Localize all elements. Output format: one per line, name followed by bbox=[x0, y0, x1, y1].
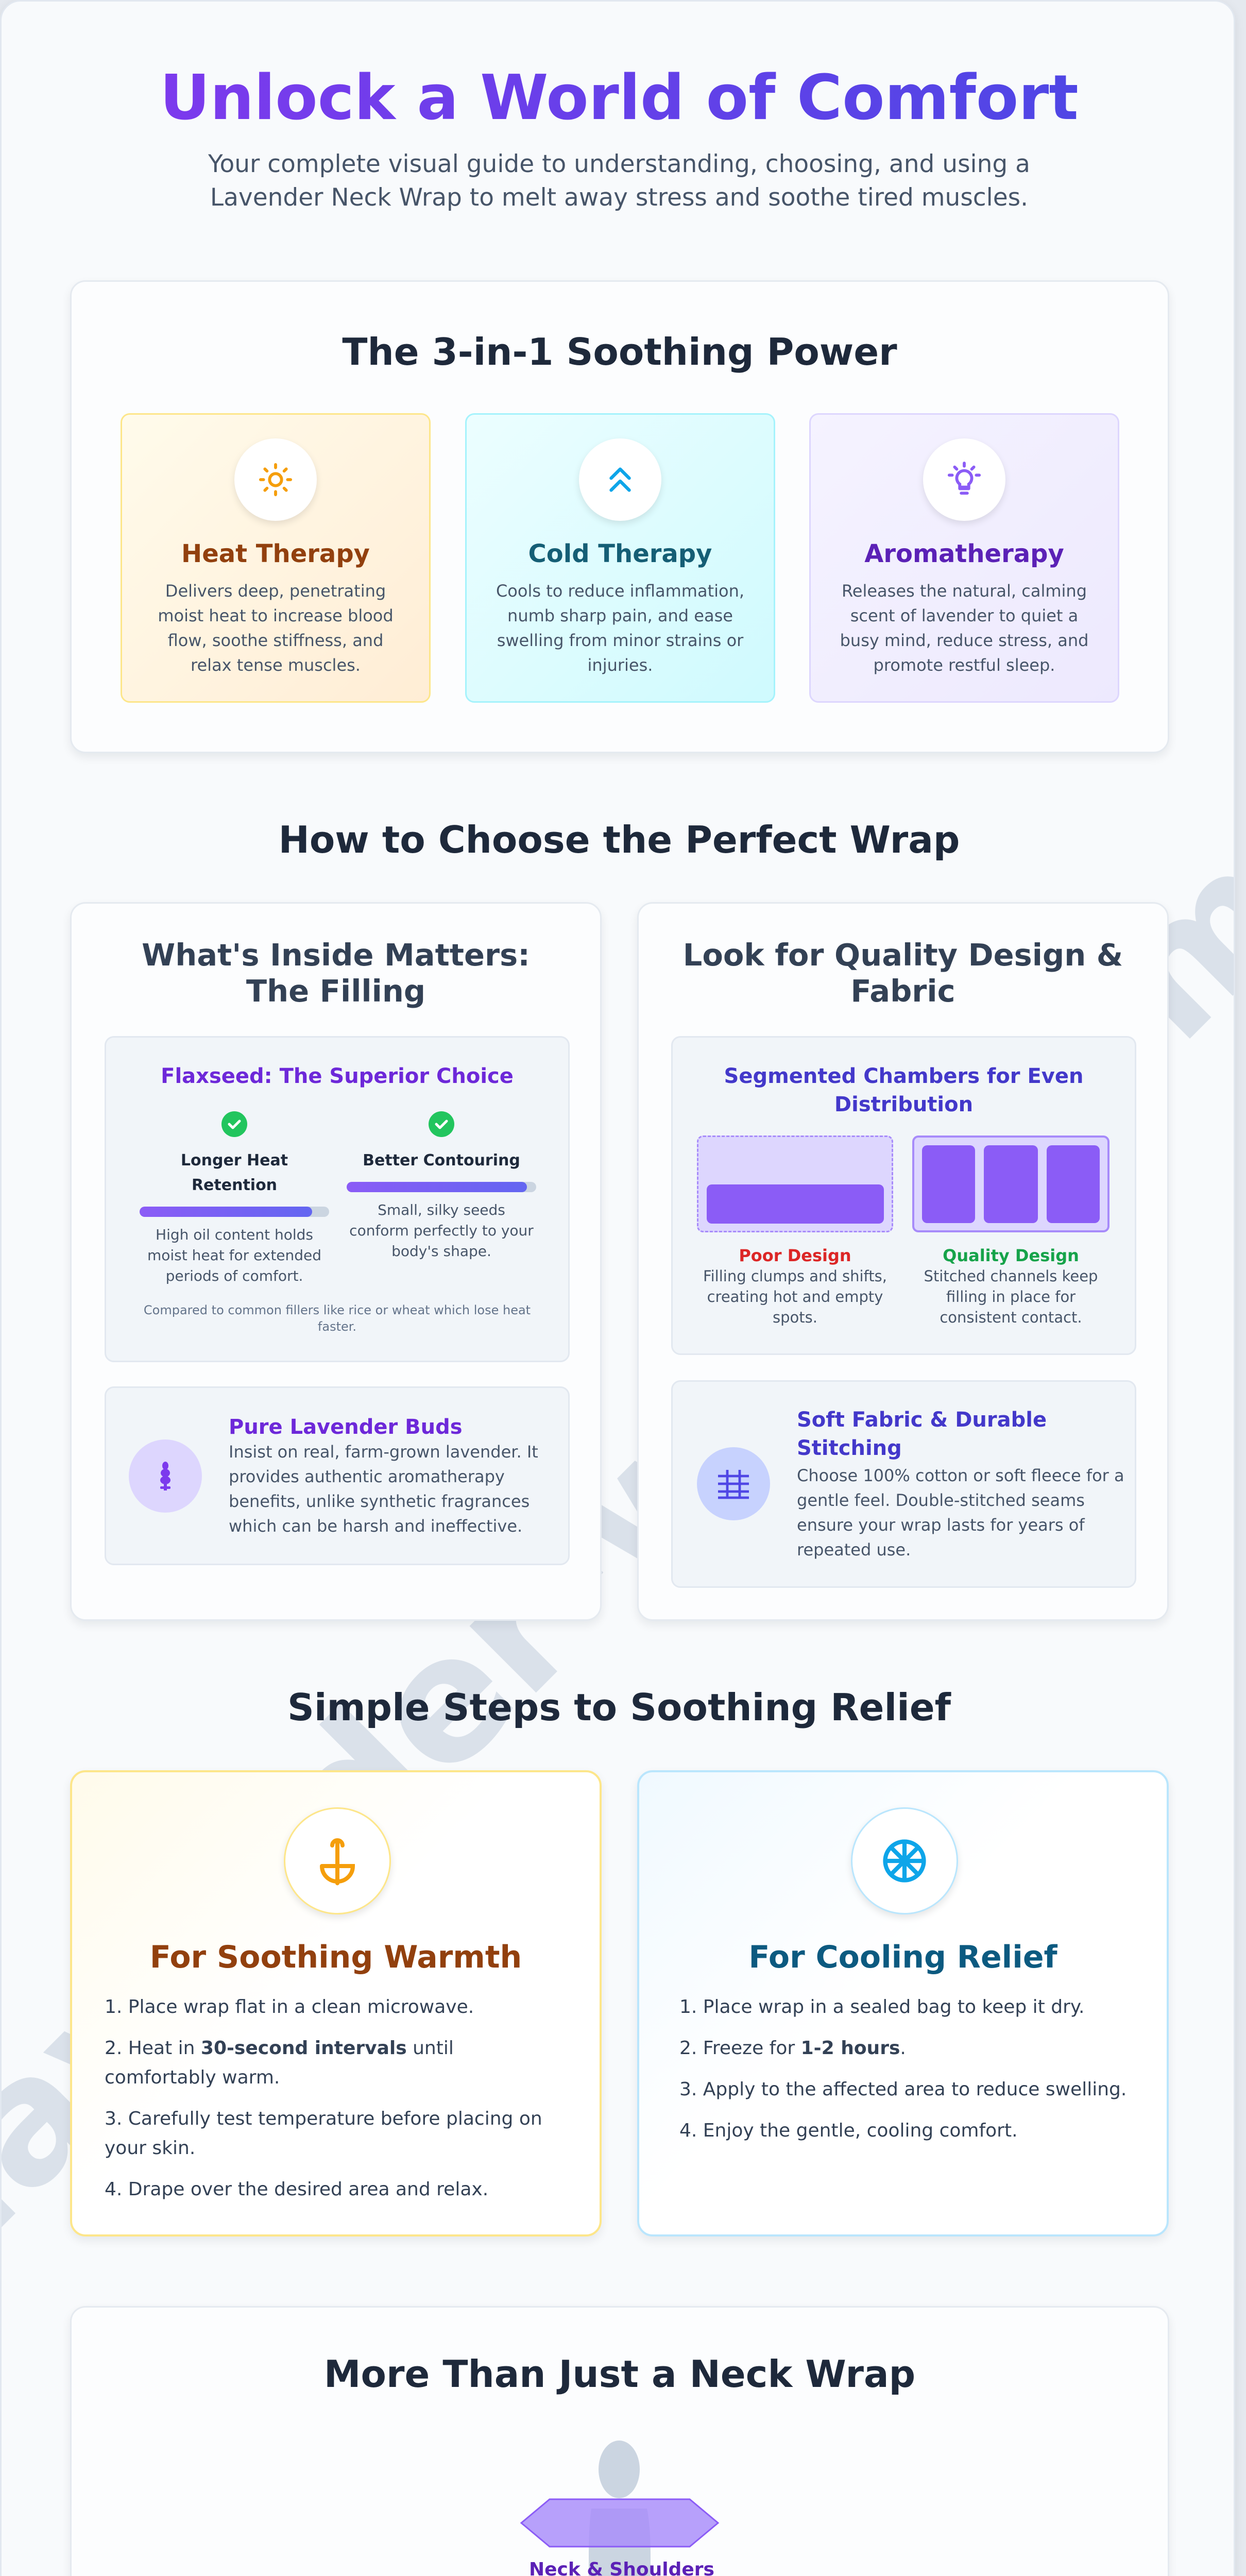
caption: poor: Filling clumps and shifts, creating hot and empty spots. bbox=[703, 1267, 887, 1326]
heading: Fabric bbox=[850, 973, 955, 1009]
subtitle bbox=[208, 150, 1030, 212]
panel: 3-in-1 soothing power bbox=[70, 280, 1169, 753]
icon: lavender bbox=[129, 1439, 202, 1513]
icon: snowflake bbox=[851, 1807, 958, 1914]
panel: more than neck wrap bbox=[70, 2306, 1169, 2576]
heading: Distribution bbox=[834, 1093, 973, 1116]
heading: Pure Lavender Buds bbox=[229, 1415, 463, 1439]
title: Unlock a World of Comfort bbox=[160, 62, 1079, 134]
feature: contouring: Small, silky seeds conform perfectly to your body's shape. bbox=[349, 1201, 534, 1260]
heading: Cold Therapy bbox=[528, 539, 712, 568]
diagram: quality design bbox=[912, 1136, 1110, 1232]
icon: check bbox=[429, 1111, 454, 1137]
steps: 2. Heat in 30-second intervals until comfortably warm. bbox=[105, 2038, 454, 2088]
steps: 3. Apply to the affected area to reduce swelling. bbox=[679, 2079, 1126, 2100]
heading: how to choose: How to Choose the Perfect Wrap bbox=[279, 818, 960, 861]
caption: poor: Poor Design bbox=[739, 1246, 851, 1265]
feature: contouring: Better Contouring bbox=[363, 1151, 520, 1170]
feature: heat retention bbox=[140, 1111, 329, 1284]
footnote: Compared to common fillers like rice or wheat which lose heat faster. bbox=[144, 1303, 531, 1334]
heading bbox=[142, 937, 530, 1009]
icon: check bbox=[221, 1111, 247, 1137]
text: Releases the natural, calming scent of lavender to quiet a busy mind, reduce stress, and promote restful sleep. bbox=[840, 581, 1088, 675]
steps: 1. Place wrap in a sealed bag to keep it dry. bbox=[679, 1996, 1085, 2018]
figure silhouette bbox=[548, 2441, 692, 2576]
box: segmented chambers bbox=[671, 1036, 1136, 1355]
feature: heat retention: High oil content holds moist heat for extended periods of comfort. bbox=[147, 1226, 321, 1284]
text: Cools to reduce inflammation, numb sharp pain, and ease swelling from minor strains or injuries. bbox=[496, 581, 744, 675]
icon: bulb bbox=[923, 438, 1005, 521]
heading: The Filling bbox=[246, 973, 425, 1009]
text: Insist on real, farm-grown lavender. It provides authentic aromatherapy benefits, unlike synthetic fragrances which can be harsh and ineffective. bbox=[229, 1442, 538, 1536]
panel: design & fabric bbox=[637, 902, 1169, 1621]
icon: chevrons bbox=[579, 438, 661, 521]
feature: heat retention: Longer Heat Retention bbox=[181, 1151, 288, 1194]
heading: For Cooling Relief bbox=[748, 1939, 1057, 1975]
panel: cooling steps bbox=[637, 1770, 1169, 2236]
steps: 2. Freeze for 1-2 hours. bbox=[679, 2038, 906, 2059]
card: cold therapy bbox=[465, 413, 775, 703]
icon: stitching bbox=[697, 1447, 770, 1520]
icon: anchor bbox=[284, 1807, 391, 1914]
heading: Flaxseed: The Superior Choice bbox=[161, 1064, 514, 1088]
heading: Heat Therapy bbox=[181, 539, 370, 568]
heading: The 3-in-1 Soothing Power bbox=[342, 330, 897, 374]
panel: warmth steps bbox=[70, 1770, 602, 2236]
heading: Soft Fabric & Durable bbox=[797, 1408, 1047, 1432]
heading bbox=[683, 937, 1123, 1009]
steps: 1. Place wrap flat in a clean microwave. bbox=[105, 1996, 474, 2018]
body diagram bbox=[520, 2441, 719, 2576]
text: Choose 100% cotton or soft fleece for a gentle feel. Double-stitched seams ensure your wrap lasts for years of repeated use. bbox=[797, 1466, 1124, 1560]
steps bbox=[679, 1996, 1126, 2141]
heading: What's Inside Matters: bbox=[142, 937, 530, 973]
heading bbox=[724, 1064, 1083, 1116]
box: fabric stitching bbox=[671, 1380, 1136, 1588]
feature: contouring bbox=[347, 1111, 536, 1260]
caption: quality: Stitched channels keep filling in place for consistent contact. bbox=[924, 1267, 1098, 1326]
icon: sun bbox=[234, 438, 317, 521]
box: flaxseed bbox=[105, 1036, 570, 1362]
heading: Stitching bbox=[797, 1436, 902, 1460]
heading: Aromatherapy bbox=[864, 539, 1064, 568]
box: lavender buds bbox=[105, 1386, 570, 1565]
panel: filling bbox=[70, 902, 602, 1621]
caption: quality: Quality Design bbox=[943, 1246, 1079, 1265]
heading: More Than Just a Neck Wrap bbox=[324, 2352, 915, 2396]
subtitle: Lavender Neck Wrap to melt away stress and soothe tired muscles. bbox=[210, 183, 1028, 212]
diagram: poor design bbox=[697, 1136, 893, 1232]
steps bbox=[105, 1996, 542, 2200]
card: heat therapy bbox=[121, 413, 431, 703]
card: aromatherapy bbox=[809, 413, 1119, 703]
heading: For Soothing Warmth bbox=[150, 1939, 522, 1975]
wrap: neck bbox=[521, 2499, 718, 2547]
steps: 4. Enjoy the gentle, cooling comfort. bbox=[679, 2120, 1018, 2141]
heading: Segmented Chambers for Even bbox=[724, 1064, 1083, 1088]
text: Delivers deep, penetrating moist heat to increase blood flow, soothe stiffness, and relax tense muscles. bbox=[158, 581, 394, 675]
heading: Look for Quality Design & bbox=[683, 937, 1123, 973]
steps: 4. Drape over the desired area and relax. bbox=[105, 2179, 488, 2200]
heading: simple steps: Simple Steps to Soothing Relief bbox=[287, 1686, 951, 1729]
steps: 3. Carefully test temperature before placing on your skin. bbox=[105, 2108, 542, 2159]
heading bbox=[797, 1408, 1047, 1460]
subtitle: Your complete visual guide to understanding, choosing, and using a bbox=[208, 150, 1030, 178]
